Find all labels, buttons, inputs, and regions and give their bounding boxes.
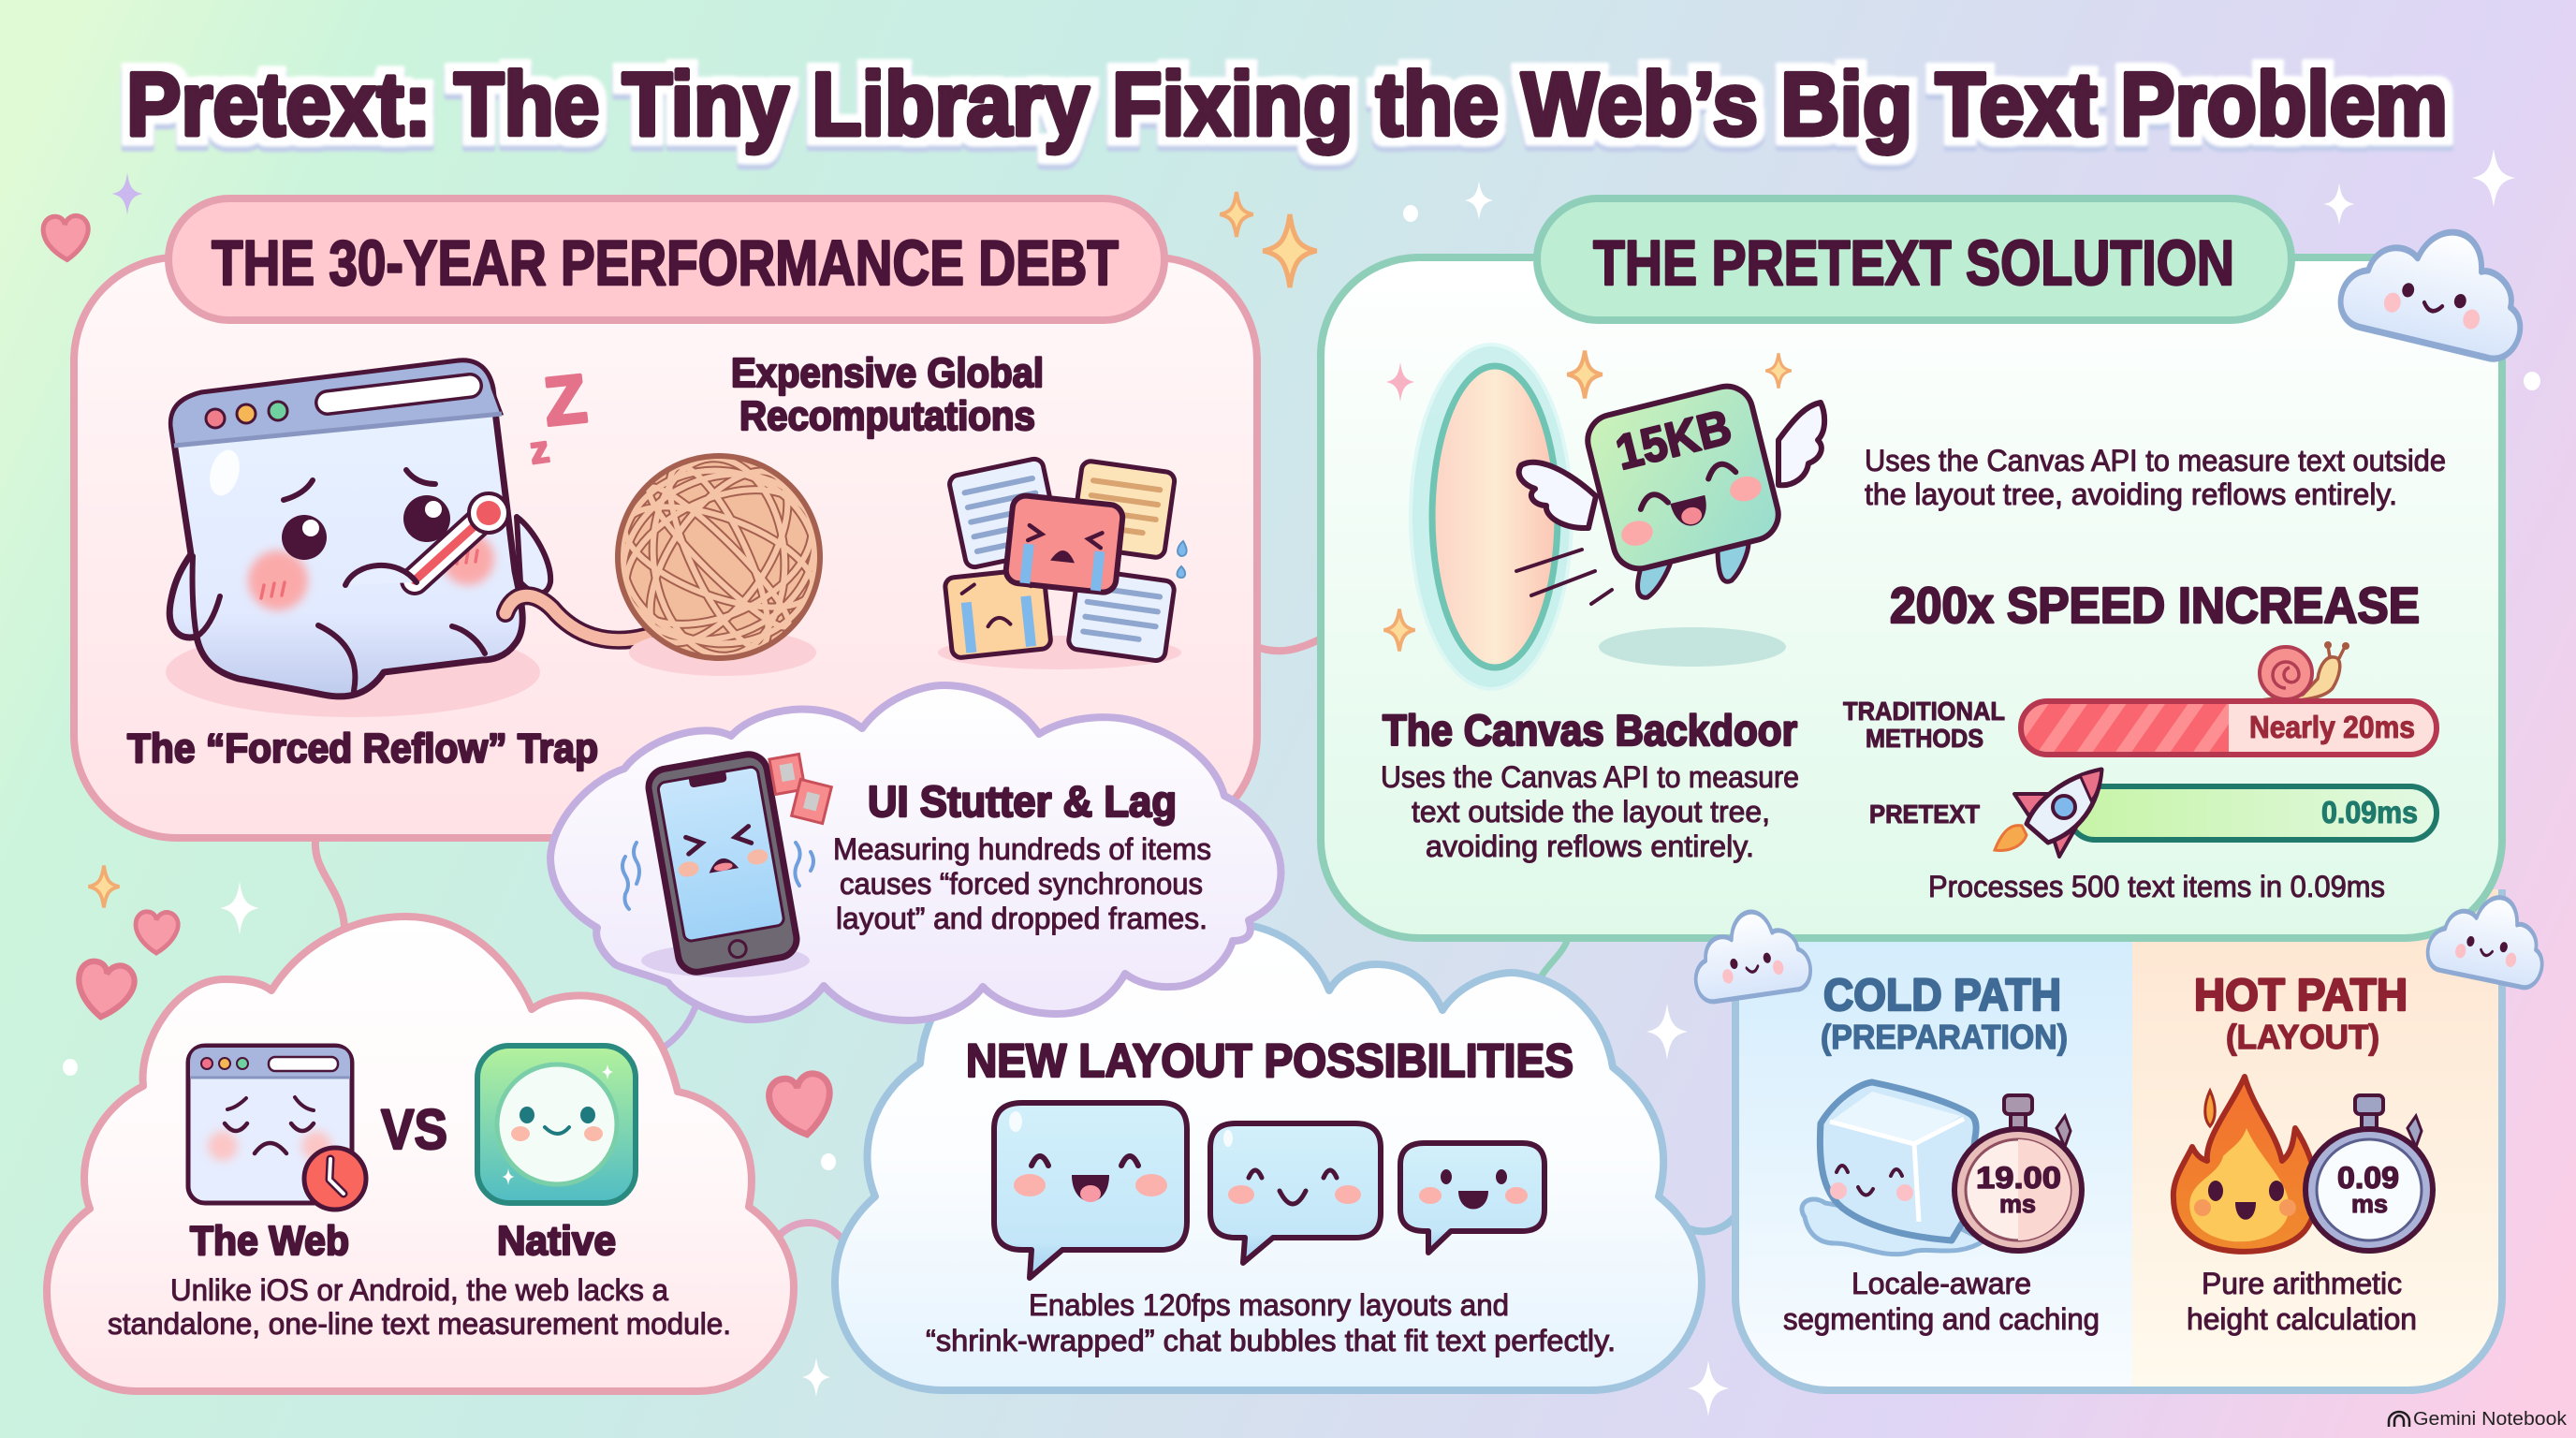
- icon: crying documents: [938, 457, 1187, 669]
- text: stutter description: Measuring hundreds of items: [833, 832, 1211, 866]
- text: expensive global recomputations: [731, 350, 1044, 439]
- text: processes 500 items: Processes 500 text items in 0.09ms: [1928, 870, 2385, 903]
- icon: portal sparkles: [1383, 350, 1792, 652]
- text: stutter description: [833, 832, 1211, 935]
- row: traditional methods: Nearly 20ms: [2249, 710, 2415, 744]
- connector: layout cloud to paths panel: [1674, 1213, 1737, 1231]
- bar chart: speed comparison: [1843, 697, 2437, 840]
- panel: the pretext solution: [1321, 198, 2502, 938]
- watermark: Gemini Notebook: Gemini Notebook: [2413, 1409, 2568, 1430]
- text: canvas API note: the layout tree, avoiding reflows entirely.: [1865, 477, 2397, 511]
- icon: stopwatch 0.09 ms: [2305, 1095, 2433, 1251]
- text: canvas backdoor: The Canvas Backdoor: [1383, 706, 1797, 755]
- heading: hot path: [2194, 971, 2408, 1056]
- icon: stopwatch 0.09 ms: 0.09: [2337, 1161, 2399, 1195]
- row: traditional methods: [1843, 697, 2437, 755]
- heading pill: the pretext solution: [1537, 198, 2291, 320]
- heading: hot path: HOT PATH: [2194, 971, 2408, 1020]
- text: hot path description: height calculation: [2187, 1302, 2417, 1336]
- text: layouts description: “shrink-wrapped” chat bubbles that fit text perfectly.: [926, 1324, 1616, 1357]
- icon: sad web browser: [188, 1046, 366, 1210]
- heading: cold path: (PREPARATION): [1821, 1018, 2068, 1056]
- icon: sick browser character: [166, 361, 550, 717]
- row: pretext: 0.09ms: [2321, 795, 2418, 829]
- icon: tangled yarn ball: [615, 453, 823, 676]
- label: forced reflow trap: The “Forced Reflow” Trap: [127, 726, 598, 771]
- icon: glowing portal: [1411, 345, 1572, 689]
- icon: sleepy Z letters: z: [527, 429, 551, 472]
- text: hot path description: [2187, 1267, 2417, 1336]
- text: cold path description: Locale-aware: [1852, 1267, 2031, 1300]
- panel: the 30-year performance debt: [74, 198, 1257, 838]
- row: traditional methods: METHODS: [1866, 724, 1983, 753]
- label: native: Native: [497, 1218, 616, 1264]
- text: canvas backdoor: [1381, 706, 1799, 863]
- heading: UI stutter and lag: UI Stutter & Lag: [868, 777, 1177, 826]
- text: canvas backdoor: text outside the layout tree,: [1412, 795, 1770, 829]
- icon: cloud right corner: [2424, 887, 2553, 990]
- text: layouts description: [926, 1288, 1616, 1357]
- text: canvas API note: Uses the Canvas API to measure text outside: [1865, 444, 2446, 477]
- heading: cold path: [1821, 971, 2068, 1056]
- label: the web: The Web: [190, 1218, 349, 1264]
- icon: happy native app: [477, 1046, 636, 1203]
- row: pretext: PRETEXT: [1869, 800, 1980, 829]
- row: traditional methods: TRADITIONAL: [1843, 697, 2005, 726]
- text: canvas backdoor: avoiding reflows entirely.: [1426, 829, 1754, 863]
- heading: hot path: (LAYOUT): [2226, 1018, 2379, 1056]
- panel: web vs native cloud: [47, 917, 794, 1391]
- text: expensive global recomputations: Recomputations: [739, 393, 1035, 439]
- heading: new layout possibilities: NEW LAYOUT POSSIBILITIES: [966, 1034, 1573, 1087]
- connector: solution panel to layout cloud: [1539, 936, 1569, 981]
- icon: flying 15KB block: [1516, 381, 1824, 667]
- icon: small chat bubble: [1400, 1143, 1544, 1253]
- icon: snail: [2254, 641, 2349, 701]
- panel: UI stutter and lag cloud: [550, 685, 1281, 1020]
- icon: stuttering phone: [622, 752, 831, 977]
- icon: stopwatch 0.09 ms: ms: [2351, 1190, 2388, 1218]
- icon: medium chat bubble: [1210, 1123, 1381, 1263]
- icon: melting ice cube: [1802, 1082, 1984, 1255]
- text: layouts description: Enables 120fps masonry layouts and: [1029, 1288, 1509, 1322]
- connector: stutter cloud to web cloud: [665, 1002, 697, 1047]
- panel: cold and hot paths: [1735, 889, 2502, 1390]
- text: expensive global recomputations: Expensive Global: [731, 350, 1044, 396]
- decoration: hearts: [42, 214, 838, 1140]
- text: VS: VS: [381, 1098, 447, 1161]
- icon: stopwatch 19.00 ms: 19.00: [1976, 1161, 2061, 1195]
- text: stutter description: causes “forced synchronous: [840, 867, 1203, 901]
- heading: 200x speed increase: 200x SPEED INCREASE: [1890, 578, 2420, 634]
- icon: cheerful flame: [2174, 1077, 2317, 1252]
- icon: yarn thread: [505, 595, 646, 640]
- icon: sleepy Z letters: [527, 361, 590, 472]
- connector: debt panel to web cloud: [315, 833, 344, 927]
- heading pill: the pretext solution: THE PRETEXT SOLUTION: [1593, 227, 2234, 299]
- text: canvas API note: [1865, 444, 2446, 511]
- icon: cloud between panels: [1686, 903, 1814, 1006]
- text: cold path description: segmenting and caching: [1783, 1302, 2100, 1336]
- connector: debt panel to solution panel: [1254, 638, 1322, 651]
- text: web vs native description: standalone, one-line text measurement module.: [108, 1307, 731, 1341]
- icon: stopwatch 19.00 ms: [1954, 1095, 2082, 1251]
- icon: stopwatch 19.00 ms: ms: [1999, 1190, 2036, 1218]
- panel: new layout possibilities cloud: [835, 922, 1702, 1390]
- heading: cold path: COLD PATH: [1823, 971, 2061, 1020]
- icon: flying 15KB block: 15KB: [1611, 400, 1736, 480]
- text: web vs native description: [108, 1273, 731, 1341]
- text: web vs native description: Unlike iOS or Android, the web lacks a: [170, 1273, 668, 1307]
- text: canvas backdoor: Uses the Canvas API to measure: [1381, 760, 1799, 794]
- text: hot path description: Pure arithmetic: [2202, 1267, 2402, 1300]
- icon: sleepy Z letters: Z: [541, 361, 590, 440]
- row: pretext: [1869, 786, 2437, 840]
- heading pill: 30-year performance debt: [168, 198, 1164, 320]
- heading pill: 30-year performance debt: THE 30-YEAR PERFORMANCE DEBT: [212, 227, 1119, 299]
- icon: large chat bubble: [994, 1103, 1187, 1278]
- icon: rocket: [1995, 770, 2101, 857]
- text: cold path description: [1783, 1267, 2100, 1336]
- text: stutter description: layout” and dropped frames.: [836, 902, 1208, 935]
- icon: cloud top right: [2334, 212, 2538, 363]
- connector: web cloud to layout cloud: [777, 1223, 844, 1241]
